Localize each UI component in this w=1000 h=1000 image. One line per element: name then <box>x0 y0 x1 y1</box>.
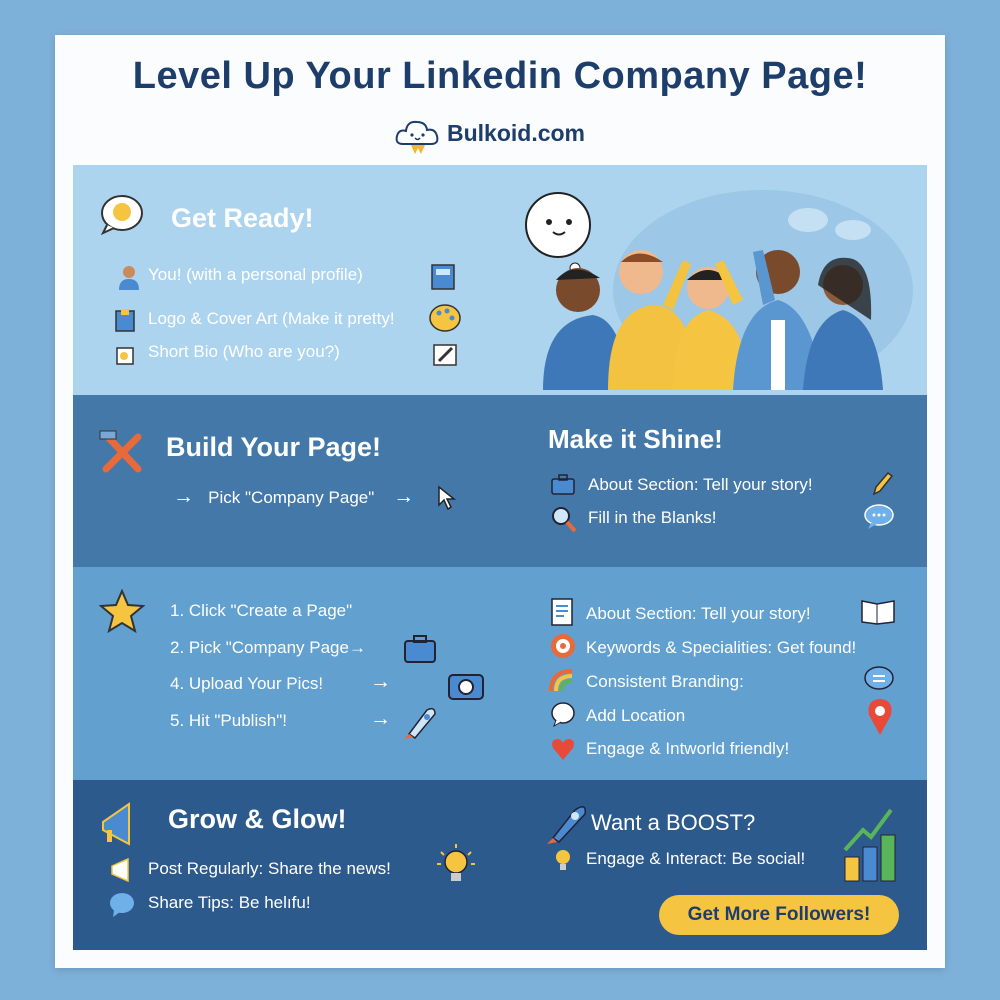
list: optimization items: Consistent Branding: <box>586 672 744 691</box>
button: Get More Followers!: Get More Followers! <box>688 904 870 925</box>
panel: get ready <box>73 165 927 395</box>
heading: Build Your Page!: Build Your Page! <box>166 432 381 462</box>
list: shine items: About Section: Tell your story! <box>588 475 813 494</box>
list: get ready items: Logo & Cover Art (Make it pretty! <box>148 309 395 328</box>
title: Level Up Your Linkedin Company Page! <box>133 55 867 97</box>
list: grow items: Post Regularly: Share the news! <box>148 859 391 878</box>
list: numbered steps: 1. Click "Create a Page" <box>170 601 352 620</box>
panel: build your page / make it shine <box>73 395 927 567</box>
list: get ready items: Short Bio (Who are you?) <box>148 342 340 361</box>
list: optimization items: Engage & Intworld friendly! <box>586 739 789 758</box>
icons: steps <box>404 635 484 739</box>
icon: megaphone <box>102 802 130 846</box>
list: optimization items: Keywords & Specialities: Get found! <box>586 638 856 657</box>
text: pick company page: → Pick "Company Page" → <box>173 485 414 508</box>
text: engage & interact: Engage & Interact: Be social! <box>586 849 805 868</box>
list: get ready items: You! (with a personal profile) <box>148 265 363 284</box>
list: optimization items: Add Location <box>586 706 685 725</box>
heading: Grow & Glow!: Grow & Glow! <box>168 804 346 834</box>
panel: grow & glow / boost <box>73 780 927 950</box>
list: grow items: Share Tips: Be helıfu! <box>148 893 311 912</box>
list: numbered steps: 5. Hit "Publish"! <box>170 711 287 730</box>
list: numbered steps: 4. Upload Your Pics! <box>170 674 323 693</box>
icons: optimization right <box>861 600 895 735</box>
list: numbered steps: 2. Pick "Company Page→ <box>170 638 366 657</box>
list: numbered steps: → <box>370 707 391 730</box>
icon: star <box>99 589 145 633</box>
heading: Want a BOOST?: Want a BOOST? <box>591 810 755 835</box>
list: get ready items <box>115 265 395 365</box>
panel: steps and optimization <box>73 567 927 780</box>
icon: cloud <box>396 120 438 154</box>
illustration: team celebrating <box>525 190 913 390</box>
list: grow items <box>110 858 391 917</box>
icon: cursor <box>438 486 456 510</box>
icon: lightbulb <box>437 844 475 881</box>
list: shine items: Fill in the Blanks! <box>588 508 716 527</box>
list: shine items <box>551 474 813 532</box>
list: numbered steps <box>170 601 391 730</box>
list: optimization items <box>549 598 856 760</box>
icon: pencil <box>872 472 893 496</box>
chart: growth bars <box>844 808 896 882</box>
heading: Get Ready!: Get Ready! <box>171 203 314 233</box>
logo: Bulkoid.com: Bulkoid.com <box>447 120 585 146</box>
list: numbered steps: → <box>370 670 391 693</box>
icon: chat bubble <box>864 504 894 529</box>
list: optimization items: About Section: Tell your story! <box>586 604 811 623</box>
icon: tools <box>100 430 142 472</box>
logo: Bulkoid.com <box>396 120 585 154</box>
button: Get More Followers! <box>659 895 899 935</box>
heading: Make it Shine!: Make it Shine! <box>548 424 723 454</box>
icon: rocket <box>547 806 586 844</box>
icon: lightbulb bubble <box>100 195 143 236</box>
icons: right side of list <box>429 264 461 366</box>
